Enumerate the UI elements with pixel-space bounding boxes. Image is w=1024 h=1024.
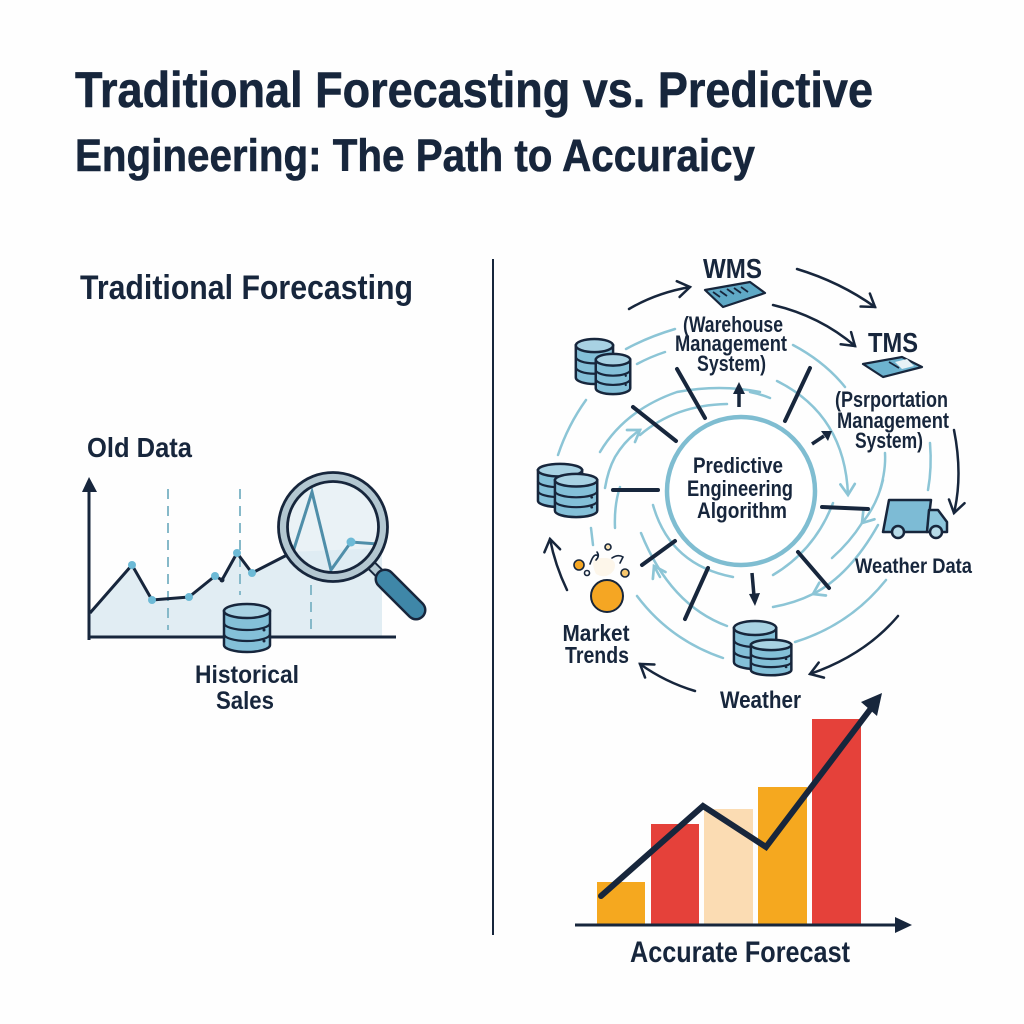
light flow arcs	[558, 329, 931, 658]
panel: traditional forecasting	[80, 269, 416, 715]
title: Traditional Forecasting vs. Predictive	[75, 62, 873, 118]
central algorithm circle: Predictive	[693, 453, 783, 478]
node: weather data truck: Weather Data	[855, 555, 972, 578]
divider	[492, 259, 494, 935]
node: WMS: WMS	[703, 253, 762, 284]
node: weather database	[720, 621, 801, 714]
label: historical sales: Sales	[216, 687, 274, 715]
label: old data: Old Data	[87, 432, 192, 463]
node: market trends	[562, 544, 630, 668]
node: WMS: (Warehouse	[683, 312, 783, 337]
title	[75, 62, 873, 181]
label: historical sales: Historical	[195, 661, 299, 689]
node: database top-left	[576, 339, 630, 394]
outer cycle arrows	[550, 269, 958, 691]
node: TMS: Management	[837, 408, 950, 433]
bar chart: accurate forecast	[575, 693, 912, 969]
line chart: old data	[82, 477, 396, 640]
label: accurate forecast: Accurate Forecast	[630, 936, 850, 969]
central algorithm circle	[667, 417, 815, 565]
central algorithm circle: Algorithm	[697, 498, 787, 523]
node: market trends: Trends	[565, 642, 629, 668]
trend arrow	[601, 693, 882, 896]
node: TMS: TMS	[868, 327, 918, 358]
heading: traditional forecasting: Traditional Forecasting	[80, 269, 413, 307]
node: WMS: Management	[675, 331, 788, 356]
node: TMS	[835, 327, 950, 453]
node: WMS	[675, 253, 788, 376]
radial spokes	[613, 368, 868, 619]
central algorithm circle: Engineering	[687, 476, 793, 501]
node: weather database: Weather	[720, 687, 801, 714]
inward arrows	[733, 382, 832, 606]
title: Engineering: The Path to Accuraicy	[75, 130, 755, 181]
node: TMS: System)	[855, 428, 923, 453]
icon: magnifying glass	[278, 472, 416, 610]
node: weather data truck	[855, 500, 972, 578]
node: market trends: Market	[562, 620, 630, 646]
icon: historical sales database	[224, 604, 270, 652]
node: TMS: (Psrportation	[835, 387, 948, 412]
node: WMS: System)	[697, 351, 766, 376]
node: database left	[538, 464, 597, 517]
panel: predictive engineering	[538, 253, 972, 714]
